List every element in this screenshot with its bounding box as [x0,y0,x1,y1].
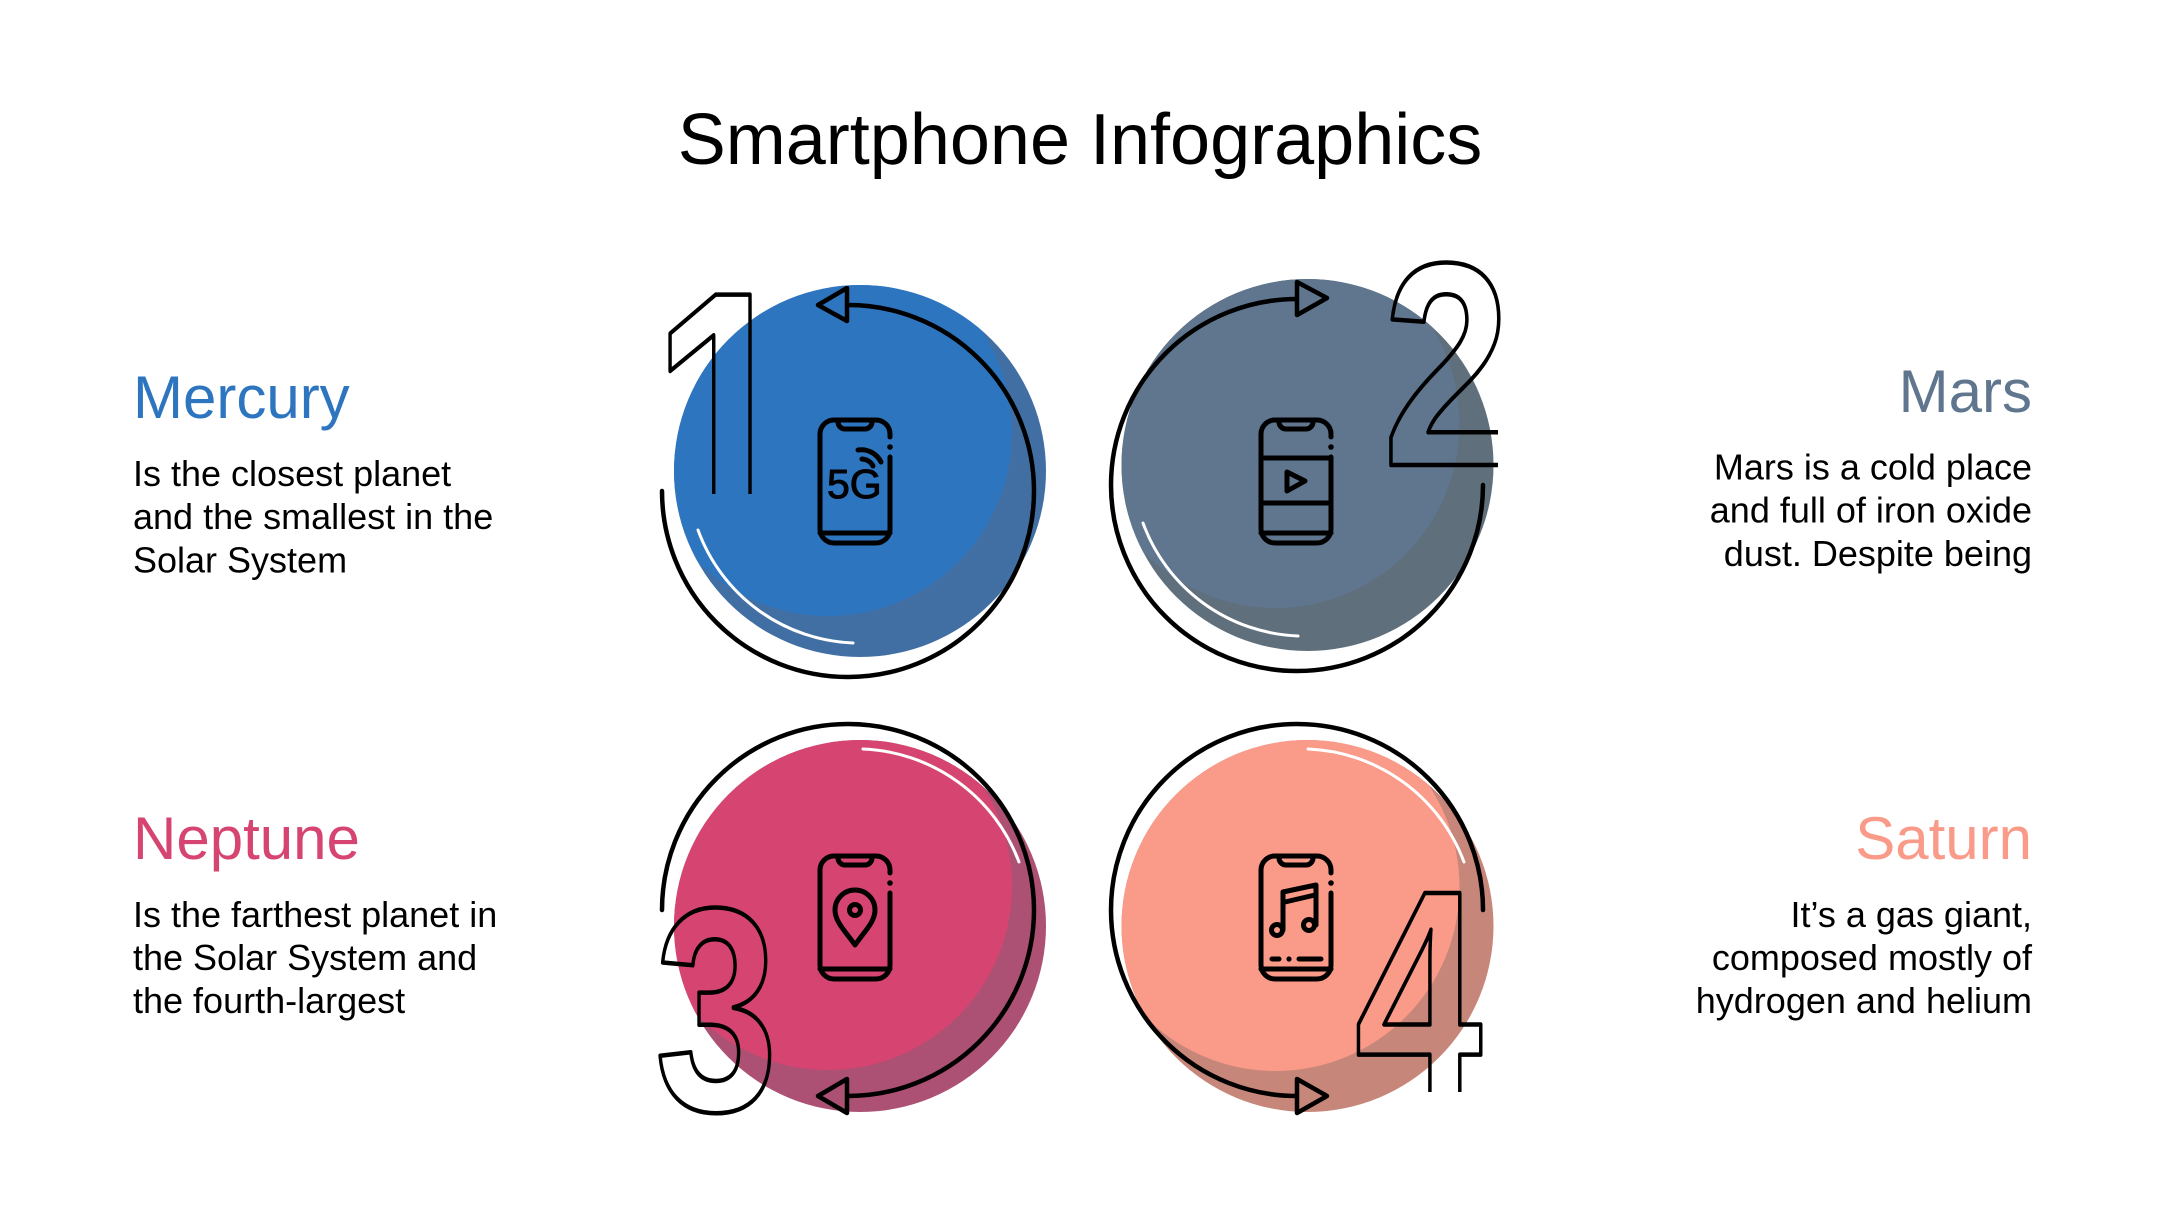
white gloss arc [698,530,853,643]
icon: location phone [820,856,893,979]
circle: pink highlight [674,740,1012,1070]
text block: Neptune description: Is the farthest planet in [133,894,497,935]
white gloss arc [1308,749,1464,862]
text block: Mars description: Mars is a cold place [1714,446,2032,488]
text block: Saturn description: composed mostly of [1712,937,2033,978]
white gloss arc [1143,523,1298,636]
text block: Mercury description: and the smallest in the [133,496,493,537]
panel: Mars text [1710,358,2032,574]
panel: circle 3 [658,722,1046,1116]
text block: Mars description: dust. Despite being [1724,533,2032,574]
icon: music phone [1261,856,1334,979]
text block: Saturn description: It’s a gas giant, [1790,894,2032,935]
heading: Neptune: Neptune [133,805,360,872]
panel: circle 4 [1108,722,1494,1116]
white gloss arc [863,749,1019,862]
circle: blue highlight [674,285,1012,616]
circle: slate highlight [1122,279,1460,608]
arrow: ring 2 [1111,282,1483,671]
circle: salmon shaded [1122,740,1494,1112]
title: Smartphone Infographics [678,100,1482,180]
circle: blue shaded [674,285,1046,657]
text block: Mars description: and full of iron oxide [1710,490,2032,530]
text block: Neptune description: the fourth-largest [133,980,405,1021]
panel: circle 1 [660,285,1046,680]
arrow: ring 4 [1111,724,1483,1113]
panel: Neptune text [133,805,497,1021]
text block: Neptune description: the Solar System and [133,937,477,978]
number 1: 1 [652,220,799,608]
text block: Mercury description: Is the closest planet [133,453,451,494]
text block: Mercury description: Solar System [133,540,347,580]
number 3: 3 [655,848,778,1172]
number 2: 2 [1383,203,1510,527]
heading: Mercury: Mercury [133,364,350,431]
text block: Saturn description: hydrogen and helium [1696,980,2032,1021]
icon: 5G phone [820,420,893,543]
icon: 5G phone: 5G [827,461,882,507]
arrow: ring 3 [662,724,1034,1113]
circle: slate shaded [1122,279,1494,651]
circle: salmon highlight [1122,740,1460,1071]
panel: Saturn text [1696,805,2033,1021]
arrow: ring 1 [662,288,1034,677]
panel: circle 2 [1108,260,1501,674]
panel: Mercury text [133,364,493,580]
number 4: 4 [1355,829,1483,1159]
circle: pink shaded [674,740,1046,1112]
heading: Saturn: Saturn [1855,805,2032,872]
icon: video phone [1261,420,1334,543]
heading: Mars: Mars [1899,358,2032,425]
